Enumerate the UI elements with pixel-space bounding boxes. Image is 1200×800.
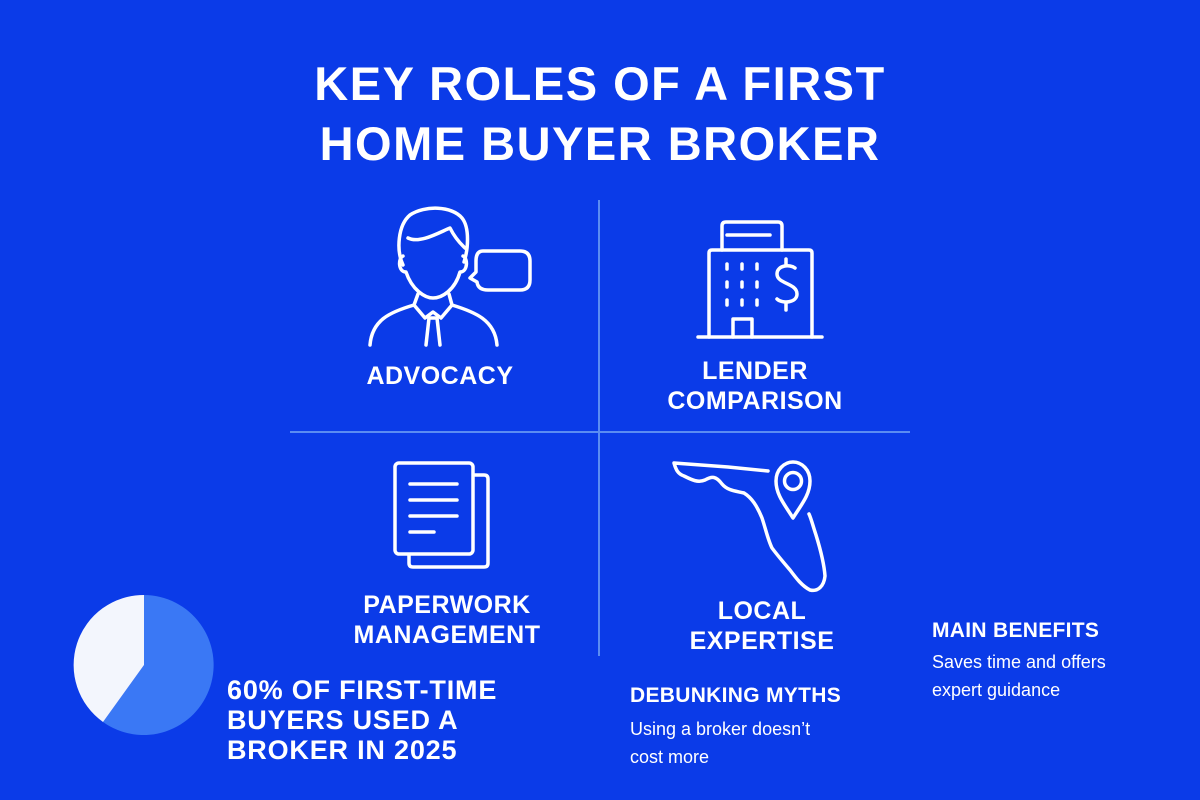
label: paperwork management: MANAGEMENT bbox=[354, 621, 540, 649]
stat text: 60% OF FIRST-TIME bbox=[227, 675, 497, 705]
label: local expertise bbox=[690, 597, 834, 655]
text block: debunking myths: Using a broker doesn’t bbox=[630, 719, 810, 739]
text block: main benefits: MAIN BENEFITS bbox=[932, 619, 1099, 642]
icon: florida map with location pin bbox=[674, 462, 825, 590]
title: KEY ROLES OF A FIRST bbox=[314, 57, 886, 110]
text block: debunking myths: cost more bbox=[630, 747, 709, 767]
icon: bank building with dollar bbox=[698, 222, 822, 337]
title: HOME BUYER BROKER bbox=[320, 117, 880, 170]
pie chart bbox=[74, 595, 214, 735]
text block: main benefits: expert guidance bbox=[932, 680, 1060, 700]
label: paperwork management: PAPERWORK bbox=[363, 591, 531, 619]
stat text bbox=[227, 675, 497, 765]
stat text: BUYERS USED A bbox=[227, 705, 458, 735]
icon: person with speech bubble bbox=[370, 208, 530, 345]
text block: main benefits: Saves time and offers bbox=[932, 652, 1106, 672]
label: local expertise: EXPERTISE bbox=[690, 627, 834, 655]
text block: main benefits bbox=[932, 619, 1106, 700]
label: advocacy: ADVOCACY bbox=[366, 362, 514, 390]
label: lender comparison: COMPARISON bbox=[667, 387, 843, 415]
label: lender comparison: LENDER bbox=[702, 357, 808, 385]
text block: debunking myths: DEBUNKING MYTHS bbox=[630, 684, 841, 707]
text block: debunking myths bbox=[630, 684, 841, 767]
icon: documents bbox=[395, 463, 488, 567]
label: local expertise: LOCAL bbox=[718, 597, 806, 625]
label: paperwork management bbox=[354, 591, 540, 649]
title bbox=[314, 57, 886, 170]
stat text: BROKER IN 2025 bbox=[227, 735, 457, 765]
label: lender comparison bbox=[667, 357, 843, 415]
